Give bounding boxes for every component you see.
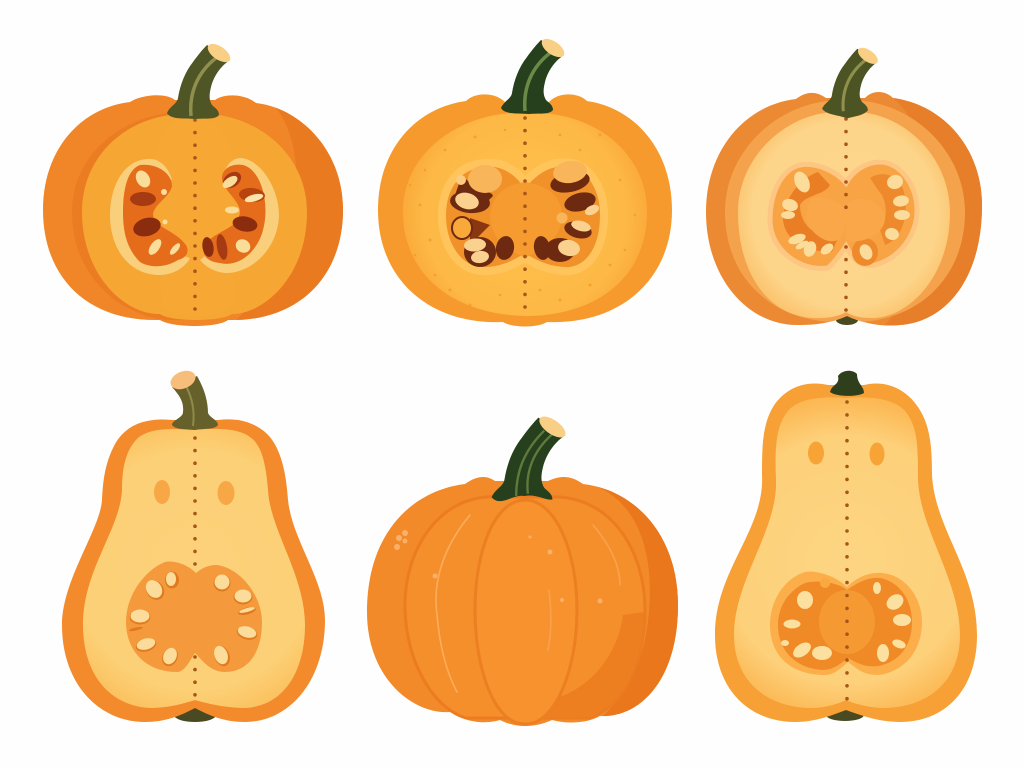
- pumpkin 6 base shadow: [826, 709, 864, 721]
- pumpkin 5 side lobes: [405, 497, 645, 718]
- pumpkin 6 left oval mark: [808, 442, 824, 464]
- pumpkin 5 body: [367, 477, 678, 726]
- pumpkin 4 dotted line upper: [193, 438, 197, 573]
- pumpkin 6: butternut-shaped cross-section: [715, 371, 977, 722]
- pumpkin 1 right seed cavity: [200, 158, 279, 273]
- pumpkin 4 right oval mark: [218, 481, 234, 505]
- pumpkin 2 centre dotted line: [523, 118, 527, 318]
- pumpkin 4 left oval mark: [154, 480, 170, 504]
- pumpkin 1 flesh: [82, 114, 307, 320]
- pumpkin 4: pear-shaped cross-section: [62, 367, 325, 722]
- pumpkin 3 base shadow: [836, 315, 858, 325]
- pumpkin 4 dotted line lower: [193, 657, 197, 704]
- pumpkin 2 flesh speckles: [409, 129, 636, 306]
- pumpkin 3 rind: [700, 85, 990, 330]
- pumpkin 3 flesh: [738, 112, 950, 318]
- pumpkin 4 seed cavity: [126, 562, 262, 672]
- pumpkin 3 dotted line lower: [844, 247, 848, 312]
- pumpkin 3 dotted line upper: [844, 119, 848, 214]
- pumpkin 6 right oval mark: [870, 442, 884, 466]
- pumpkin 3 seed cavity: [770, 162, 917, 268]
- pumpkin 2 rind: [378, 94, 672, 327]
- pumpkin 5 highlight lines: [436, 515, 620, 692]
- pumpkin 1 left seed cavity: [110, 159, 190, 275]
- pumpkin 5 stem: [492, 413, 569, 501]
- pumpkin 2 flesh: [403, 113, 647, 316]
- pumpkin 1 centre dotted line: [193, 120, 197, 316]
- pumpkin 5: whole pumpkin exterior: [360, 413, 690, 732]
- pumpkin 1 stem: [167, 40, 233, 119]
- pumpkin 2 stem: [501, 35, 567, 114]
- pumpkin 1: round orange cross-section: [40, 40, 350, 330]
- pumpkin 6 stem: [830, 371, 864, 396]
- pumpkin 6 centre dotted line: [845, 402, 849, 705]
- pumpkin 5 right shadow: [596, 486, 678, 716]
- pumpkin 2: golden speckled cross-section: [378, 35, 672, 326]
- pumpkin 2 seed cavity: [442, 159, 604, 271]
- pumpkin 3 stem: [822, 45, 881, 118]
- pumpkin 6 rind: [715, 384, 977, 722]
- pumpkin 5 centre lobe: [475, 500, 577, 724]
- pumpkin 4 stem: [168, 367, 218, 430]
- pumpkin 5 lower right lobe shade: [545, 612, 644, 718]
- pumpkin 6 seed cavity: [770, 572, 922, 675]
- pumpkin 5 speckles: [394, 530, 602, 604]
- pumpkin 4 rind: [62, 419, 325, 722]
- pumpkin 6 flesh: [734, 397, 960, 708]
- pumpkin 4 flesh: [83, 429, 305, 708]
- pumpkin 4 base shadow: [174, 708, 216, 722]
- pumpkin 1 rind: [40, 90, 350, 330]
- pumpkin 3: pale flesh cross-section: [700, 45, 990, 330]
